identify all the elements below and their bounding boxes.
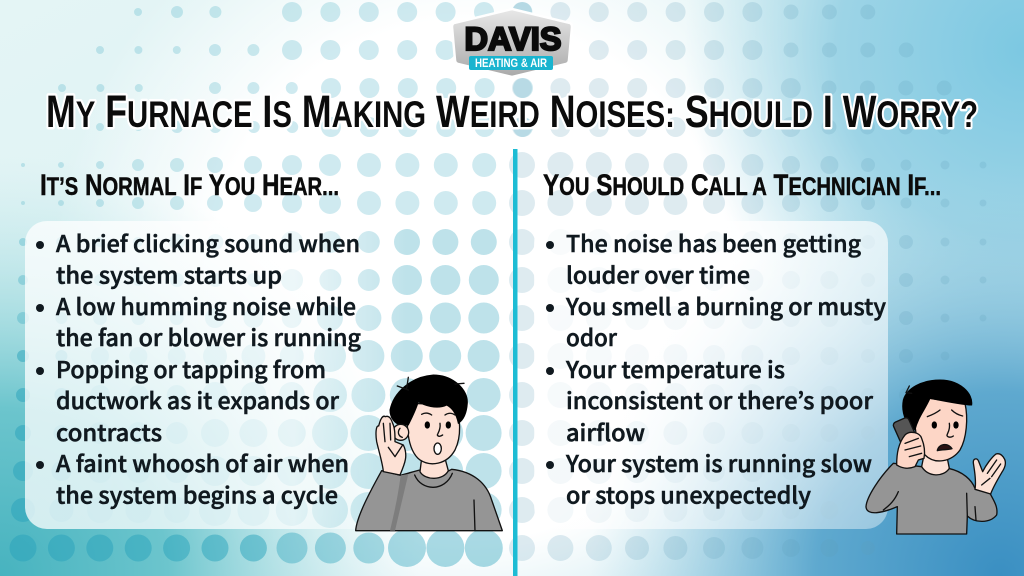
list: normal noises: A low humming noise while bbox=[56, 288, 356, 322]
logo: Davis Heating & Air bbox=[452, 9, 572, 77]
illustration: worried man on the phone bbox=[866, 380, 1005, 534]
heading: call a technician: YOU SHOULD CALL A TECHNICIAN IF... bbox=[543, 169, 941, 202]
list: call a technician: You smell a burning or musty bbox=[565, 288, 886, 322]
center divider bbox=[513, 149, 518, 576]
list: call a technician: Your system is running slow bbox=[565, 445, 872, 479]
list: normal noises bbox=[36, 225, 361, 510]
list: call a technician: airflow bbox=[566, 414, 645, 448]
list: call a technician: The noise has been getting bbox=[566, 225, 861, 259]
list: normal noises: the system begins a cycle bbox=[56, 476, 338, 510]
logo: Davis Heating & Air: HEATING & AIR bbox=[475, 58, 548, 70]
list: call a technician bbox=[546, 225, 886, 510]
list: normal noises: Popping or tapping from bbox=[56, 351, 326, 385]
heading: normal noises: IT’S NORMAL IF YOU HEAR... bbox=[40, 169, 339, 202]
list: call a technician: odor bbox=[566, 319, 618, 353]
list: normal noises: contracts bbox=[56, 414, 162, 448]
list: normal noises: ductwork as it expands or bbox=[56, 382, 340, 416]
logo: Davis Heating & Air: DAVIS bbox=[464, 21, 562, 57]
list: normal noises: the system starts up bbox=[56, 256, 282, 290]
illustration: man cupping ear to listen bbox=[356, 375, 502, 531]
list: normal noises: A brief clicking sound when bbox=[56, 225, 360, 259]
panel: normal noises backing bbox=[25, 221, 515, 529]
list: call a technician: inconsistent or there’s poor bbox=[566, 382, 874, 416]
panel: call a technician backing bbox=[534, 221, 888, 529]
list: normal noises: A faint whoosh of air when bbox=[56, 445, 349, 479]
list: normal noises: the fan or blower is running bbox=[56, 319, 361, 353]
list: call a technician: Your temperature is bbox=[565, 351, 785, 385]
list: call a technician: louder over time bbox=[566, 256, 750, 290]
list: call a technician: or stops unexpectedly bbox=[566, 476, 811, 510]
title: MY FURNACE IS MAKING WEIRD NOISES: SHOULD I WORRY? bbox=[46, 86, 978, 137]
